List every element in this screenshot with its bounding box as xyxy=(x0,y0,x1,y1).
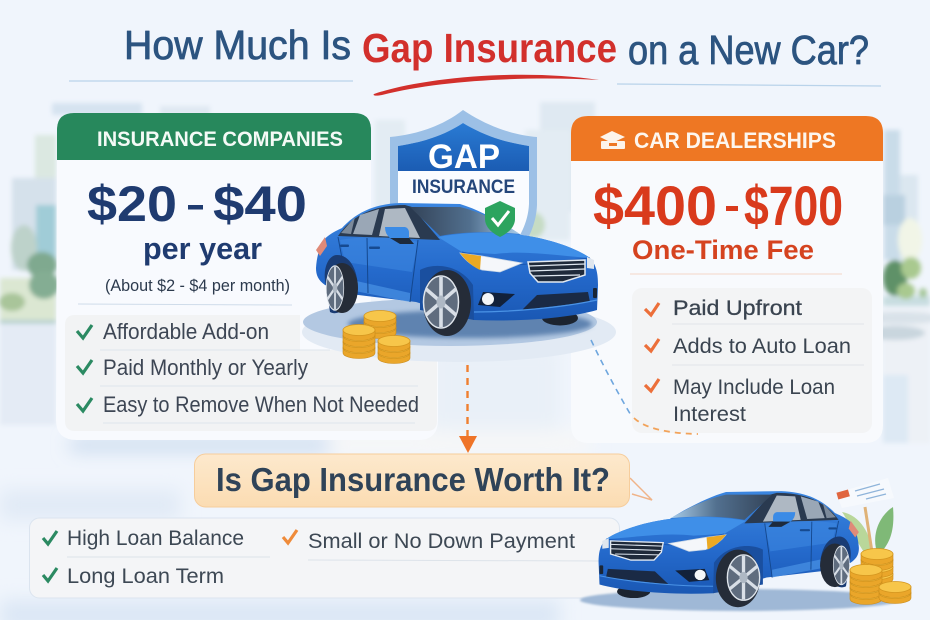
price: $20 - $40: $20 xyxy=(87,176,177,232)
panel: car dealerships xyxy=(571,116,883,443)
car: blue sedan front-left xyxy=(599,491,859,607)
panel: who benefits: High Loan Balance xyxy=(67,527,244,550)
car: blue sedan xyxy=(316,203,598,336)
costs list: Adds to Auto Loan xyxy=(673,335,851,358)
price: $20 - $40 xyxy=(87,176,307,232)
price: $20 - $40: $40 xyxy=(213,176,307,232)
panel: who benefits: Long Loan Term xyxy=(67,565,224,588)
title: on a New Car? xyxy=(628,27,869,73)
panel: who benefits: Small or No Down Payment xyxy=(308,530,575,553)
header: car dealerships: CAR DEALERSHIPS xyxy=(634,128,836,153)
icon: graduation cap xyxy=(600,131,625,149)
costs list: Interest xyxy=(673,403,746,426)
per year: per year xyxy=(143,231,262,266)
arrow: down to question xyxy=(459,365,477,453)
icon: coins beside car xyxy=(343,310,410,364)
title underline swoosh xyxy=(374,75,599,96)
title: How Much Is xyxy=(124,22,351,68)
arrow: dashed curve from car to dealership card xyxy=(591,340,698,434)
question banner xyxy=(194,454,652,507)
icon: gap insurance shield: INSURANCE xyxy=(412,177,515,198)
benefits list: Easy to Remove When Not Needed xyxy=(103,392,419,417)
header: insurance companies: INSURANCE COMPANIES xyxy=(97,128,343,151)
title: Gap Insurance xyxy=(362,25,617,71)
ground disc under car xyxy=(302,298,616,362)
costs list xyxy=(632,288,872,433)
icon: green check badge xyxy=(485,201,515,237)
price: $400 - $700: $400 xyxy=(593,174,717,237)
plant and document xyxy=(836,478,894,555)
question banner: Is Gap Insurance Worth It? xyxy=(216,461,610,498)
panel: who benefits xyxy=(30,518,620,598)
price: $400 - $700: $700 xyxy=(744,174,843,237)
icon: coins stack xyxy=(850,548,911,604)
benefits list: Affordable Add-on xyxy=(103,319,269,344)
benefits list xyxy=(65,315,437,431)
title xyxy=(124,22,869,73)
header: insurance companies xyxy=(57,113,371,160)
costs list: Paid Upfront xyxy=(673,297,802,320)
costs list: May Include Loan xyxy=(673,376,835,399)
icon: gap insurance shield xyxy=(390,110,537,300)
price: $400 - $700 xyxy=(593,174,843,237)
panel: insurance companies xyxy=(56,113,438,440)
monthly note: (About $2 - $4 per month) xyxy=(105,276,290,295)
icon: gap insurance shield: GAP xyxy=(428,138,500,176)
header: car dealerships xyxy=(571,116,883,161)
one-time fee: One-Time Fee xyxy=(632,235,814,265)
car shadow xyxy=(580,589,900,611)
benefits list: Paid Monthly or Yearly xyxy=(103,355,308,380)
